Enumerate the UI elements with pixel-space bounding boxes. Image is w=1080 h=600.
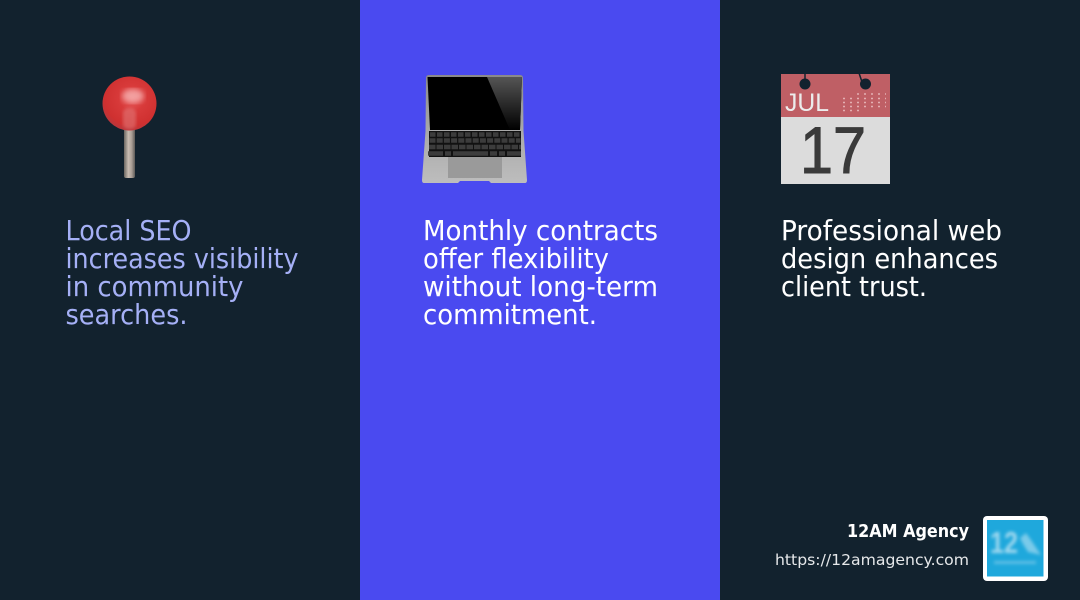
text: monthly contracts (423, 215, 658, 331)
logo (983, 516, 1048, 581)
icon: calendar: 17 (800, 113, 866, 187)
text: local SEO: in community (66, 271, 244, 303)
icon: round pushpin (102, 76, 156, 178)
text: monthly contracts: commitment. (423, 299, 597, 331)
text: local SEO (66, 215, 298, 331)
icon: calendar (781, 73, 890, 187)
icon: laptop (422, 75, 527, 183)
text: monthly contracts: Monthly contracts (423, 215, 658, 247)
icon: calendar: JUL (785, 89, 829, 117)
text: web design: design enhances (781, 243, 998, 275)
text: web design (781, 215, 1002, 303)
text: local SEO: increases visibility (66, 243, 298, 275)
text: monthly contracts: without long-term (423, 271, 658, 303)
text: local SEO: Local SEO (66, 215, 192, 247)
panel: monthly contracts (360, 0, 720, 600)
agency name: 12AM Agency (847, 521, 969, 542)
text: web design: client trust. (781, 271, 927, 303)
text: web design: Professional web (781, 215, 1002, 247)
logo: 12 (990, 525, 1018, 560)
panel: local SEO (0, 0, 360, 600)
panel: web design (720, 0, 1080, 600)
text: monthly contracts: offer flexibility (423, 243, 609, 275)
agency url: https://12amagency.com (775, 551, 969, 569)
text: local SEO: searches. (66, 299, 188, 331)
